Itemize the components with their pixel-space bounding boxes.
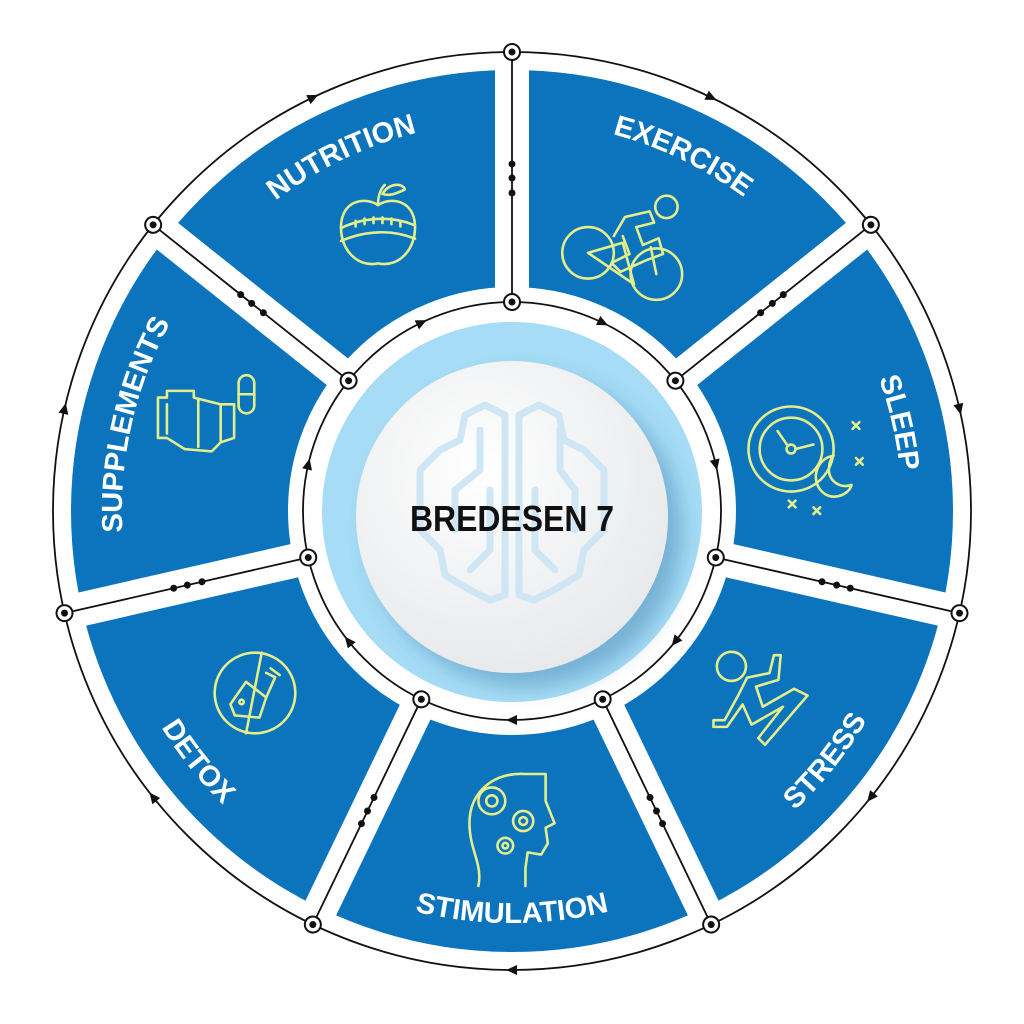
icon: head with gears <box>469 774 555 886</box>
icon: no-chemicals flask <box>215 653 295 733</box>
label: detox: DETOX <box>162 718 237 805</box>
label: nutrition: NUTRITION <box>266 114 415 200</box>
panel: blue segment ring <box>53 40 971 935</box>
icon: apple with tape <box>341 185 415 264</box>
label: supplements: SUPPLEMENTS <box>102 316 168 532</box>
icon: supplement bottle and capsule <box>158 375 254 451</box>
center title: BREDESEN 7 <box>410 498 614 539</box>
segment labels <box>102 114 919 923</box>
label: stimulation: STIMULATION <box>416 892 608 923</box>
label: stress: STRESS <box>784 713 864 808</box>
icon: cyclist <box>562 196 682 300</box>
label: sleep: SLEEP <box>880 375 919 468</box>
icon: faint brain <box>420 405 604 600</box>
center: light blue ring <box>322 322 702 702</box>
label: exercise: EXERCISE <box>614 115 754 197</box>
icon: stressed runner <box>713 652 808 745</box>
center: white disc <box>356 361 668 673</box>
icon: clock and moon <box>748 406 863 514</box>
